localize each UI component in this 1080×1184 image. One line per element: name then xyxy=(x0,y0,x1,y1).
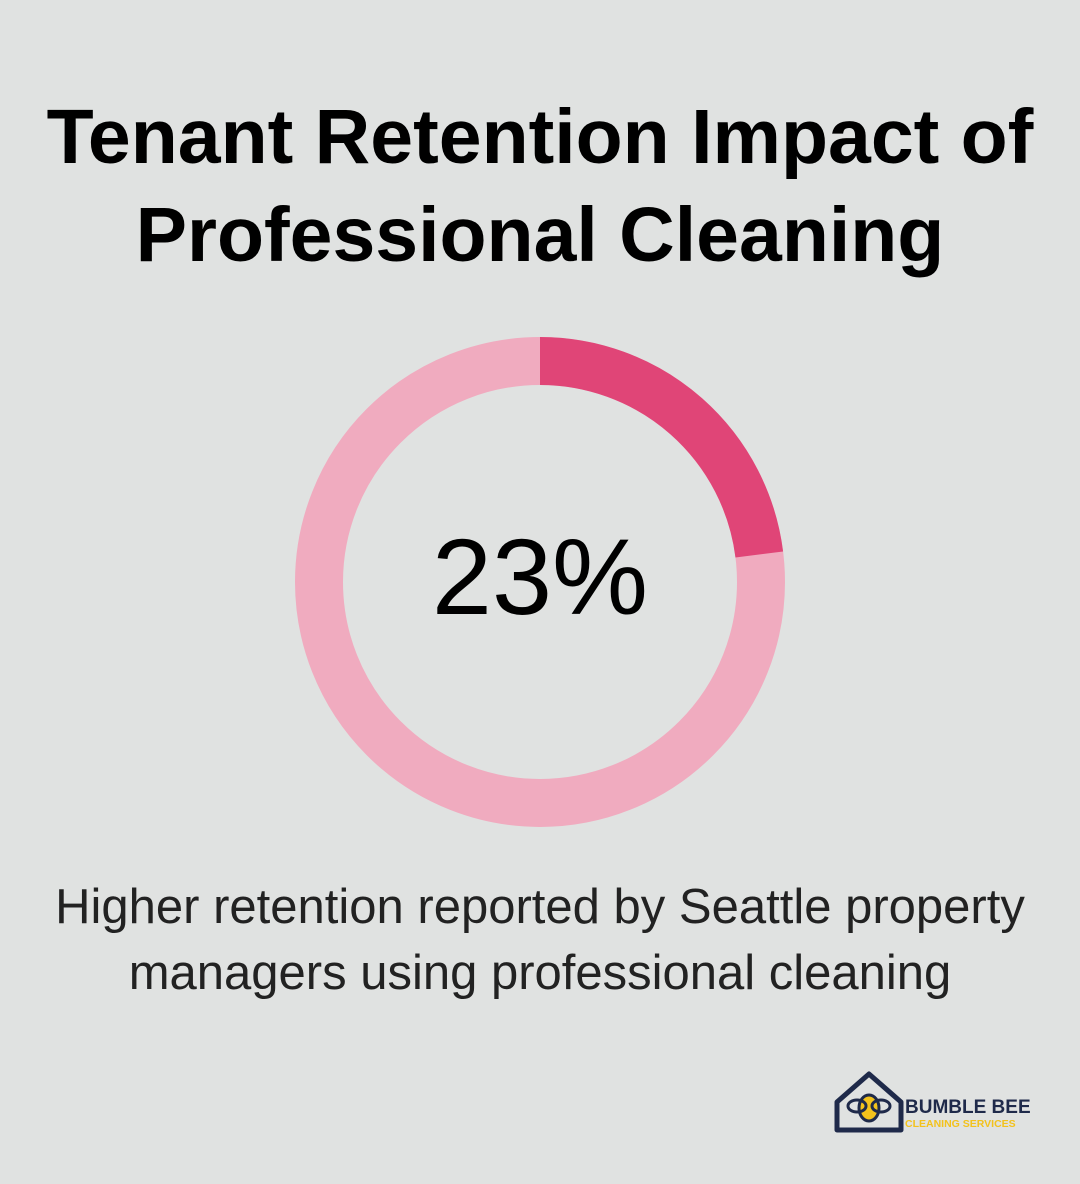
logo: BUMBLE BEE xyxy=(905,1097,1031,1118)
title: Tenant Retention Impact of xyxy=(47,94,1033,180)
subtitle: Higher retention reported by Seattle property xyxy=(55,880,1025,934)
donut chart: 23% xyxy=(432,516,648,637)
logo: CLEANING SERVICES xyxy=(905,1118,1016,1130)
logo xyxy=(834,1071,1031,1132)
subtitle: managers using professional cleaning xyxy=(129,946,951,1000)
subtitle xyxy=(55,880,1025,1000)
title: Professional Cleaning xyxy=(136,192,944,278)
title xyxy=(47,94,1034,278)
